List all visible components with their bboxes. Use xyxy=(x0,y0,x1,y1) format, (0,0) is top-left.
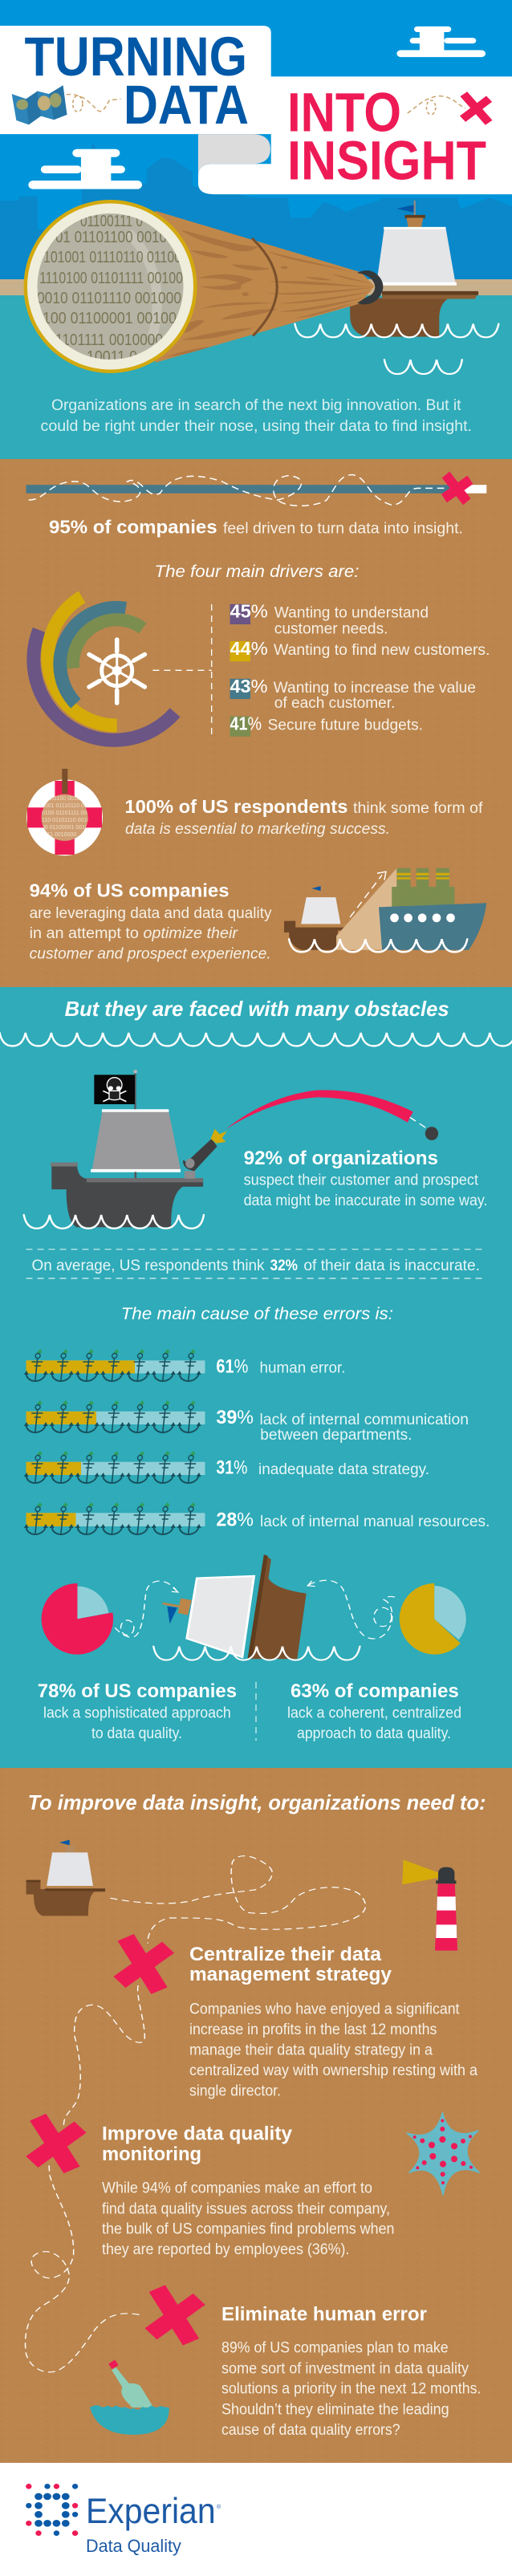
telescope lens xyxy=(24,200,197,373)
icon: x mark one xyxy=(120,1937,169,1991)
panel: obstacles xyxy=(0,987,512,1768)
legend: 41 percent xyxy=(230,713,423,737)
illustration: pirate ship firing cannon xyxy=(24,1070,438,1229)
stat: 100 percent of US respondents: data is essential to marketing success. xyxy=(125,821,390,838)
icon: ship wheel xyxy=(89,639,144,703)
icon: life buoy: 0100 01101111 0010 xyxy=(42,811,93,816)
ship body xyxy=(24,1090,438,1229)
icon: x mark two xyxy=(32,2117,80,2170)
pie chart: 63 percent xyxy=(400,1583,466,1655)
legend: 43 percent xyxy=(230,676,476,712)
legend: 41 percent: Secure future budgets. xyxy=(268,717,423,733)
step: centralize: increase in profits in the last 12 months xyxy=(189,2021,437,2038)
stat: 94 percent of US companies: customer and prospect experience. xyxy=(30,946,271,963)
icon: world map with trail xyxy=(12,85,121,124)
anchor row: 61 percent xyxy=(23,1349,345,1381)
cannon ball arc xyxy=(226,1090,438,1140)
stat: 100 percent of US respondents: 100% of US respondents xyxy=(124,796,347,817)
logo dots xyxy=(26,2484,78,2536)
stat: 94 percent of US companies: in an attempt to optimize their xyxy=(30,925,238,942)
logo wordmark: Data Quality xyxy=(86,2536,181,2556)
title: turning data: DATA xyxy=(124,74,249,136)
title: into insight: INTO xyxy=(287,82,401,143)
callout: 32 percent inaccurate: of their data is inaccurate. xyxy=(303,1258,480,1274)
step: eliminate human error: some sort of investment in data quality xyxy=(221,2360,469,2377)
binary code in lens: 1110100 01101111 00100 xyxy=(39,270,183,287)
waves divider xyxy=(0,1033,512,1046)
cannon xyxy=(183,1129,227,1179)
logo wordmark: ® xyxy=(217,2504,221,2510)
title: turning data: TURNING xyxy=(24,26,247,87)
icon: trail to x mark xyxy=(408,94,490,123)
step: improve monitoring xyxy=(102,2123,395,2258)
stat: 63 percent of companies: lack a coherent, centralized xyxy=(287,1705,461,1722)
legend: 43 percent: 43% xyxy=(230,676,268,697)
title banner shapes xyxy=(0,26,512,194)
intro text: could be right under their nose, using their data to find insight. xyxy=(40,418,472,435)
stat: 92 percent of organizations xyxy=(244,1148,488,1209)
progress bar with trail and x xyxy=(26,475,486,506)
dashed trail: second x to third x xyxy=(26,2165,142,2372)
title: into insight: INSIGHT xyxy=(287,130,486,191)
stat: 94 percent of US companies xyxy=(30,880,272,963)
legend: 45 percent: 45% xyxy=(230,601,268,622)
icon: life buoy: 1111 0010000 xyxy=(42,832,76,838)
legend: 43 percent: of each customer. xyxy=(274,695,395,712)
stat: 63 percent of companies: 63% of companies xyxy=(291,1680,459,1702)
stat: 94 percent of US companies: 94% of US companies xyxy=(30,880,230,901)
stat: 92 percent of organizations: data might be inaccurate in some way. xyxy=(244,1193,488,1209)
icon: life buoy: 01101100 0010 xyxy=(42,796,80,802)
panel: header xyxy=(0,0,512,459)
icon: starfish xyxy=(407,2113,479,2195)
sand strip xyxy=(0,279,512,295)
step: improve monitoring: they are reported by employees (36%). xyxy=(102,2241,349,2258)
step: centralize: Companies who have enjoyed a significant xyxy=(189,2001,460,2017)
illustration: small ship xyxy=(26,1840,105,1916)
legend: 44 percent xyxy=(230,638,490,661)
step: eliminate human error xyxy=(221,2304,482,2439)
stat: 100 percent of US respondents: think some form of xyxy=(353,800,483,817)
teal background xyxy=(0,987,512,1768)
legend: 43 percent: Wanting to increase the value xyxy=(274,680,476,697)
step: eliminate human error: Shouldn’t they eliminate the leading xyxy=(221,2401,449,2418)
stat: 95 percent of companies xyxy=(49,516,463,537)
anchor row: 61 percent: 61% xyxy=(216,1356,248,1378)
waves xyxy=(295,324,498,374)
anchor row: 31 percent: inadequate data strategy. xyxy=(258,1461,429,1478)
binary code in lens: 01100111 0 xyxy=(80,213,143,230)
subheading: four main drivers: The four main drivers are: xyxy=(154,563,360,581)
illustration: sinking ship with trails xyxy=(115,1554,398,1660)
step: improve monitoring: the bulk of US companies find problems when xyxy=(102,2220,395,2237)
panel: footer xyxy=(0,2463,512,2576)
anchor row: 31 percent: 31% xyxy=(216,1457,247,1479)
icon: lighthouse xyxy=(402,1859,457,1951)
logo wordmark: Experian xyxy=(86,2492,216,2531)
step: eliminate human error: Eliminate human error xyxy=(221,2304,427,2326)
illustration: telescope xyxy=(24,200,383,373)
illustration: ship behind telescope xyxy=(350,201,478,337)
pirate flag xyxy=(94,1070,137,1110)
anchor row: 28 percent: lack of internal manual resources. xyxy=(260,1514,490,1530)
logo wordmark xyxy=(86,2492,221,2556)
callout: 32 percent inaccurate: On average, US respondents think xyxy=(32,1258,265,1274)
title: turning data xyxy=(24,26,249,136)
step: centralize xyxy=(189,1944,477,2100)
step: eliminate human error: cause of data quality errors? xyxy=(221,2422,400,2439)
step: centralize: single director. xyxy=(189,2083,281,2100)
step: centralize: Centralize their data xyxy=(189,1944,382,1965)
step: centralize: management strategy xyxy=(189,1964,392,1985)
step: improve monitoring: While 94% of companies make an effort to xyxy=(102,2180,372,2197)
stat: 78 percent of US companies: to data quality. xyxy=(91,1725,182,1742)
icon: life buoy xyxy=(26,769,103,855)
anchor row: 39 percent: between departments. xyxy=(260,1427,412,1444)
stat: 63 percent of companies xyxy=(287,1680,461,1742)
anchor row: 28 percent xyxy=(23,1502,490,1534)
stat: 92 percent of organizations: 92% of organizations xyxy=(244,1148,438,1169)
icon: life buoy: 00 01100001 0010 xyxy=(42,825,88,831)
stat: 95 percent of companies: 95% of companies xyxy=(49,516,217,537)
panel: drivers xyxy=(0,459,512,987)
callout: 32 percent inaccurate xyxy=(26,1249,486,1278)
sky background xyxy=(0,0,512,279)
anchor row: 28 percent: 28% xyxy=(216,1509,254,1531)
step: improve monitoring: monitoring xyxy=(102,2143,201,2165)
legend: 41 percent: 41% xyxy=(230,713,262,733)
step: improve monitoring: Improve data quality xyxy=(102,2123,293,2145)
pie chart: 78 percent xyxy=(42,1583,113,1655)
dashed trail: first x to second x xyxy=(63,1985,144,2125)
anchor row: 31 percent xyxy=(23,1451,429,1483)
stat: 94 percent of US companies: are leveraging data and data quality xyxy=(30,905,272,922)
binary code in lens: 101001 01110110 01100 xyxy=(43,249,181,266)
city skyline xyxy=(0,142,512,279)
icon: cloud left xyxy=(28,149,142,189)
intro text: Organizations are in search of the next big innovation. But it xyxy=(51,397,461,414)
stat: 95 percent of companies: feel driven to turn data into insight. xyxy=(223,520,463,537)
panel: recommendations xyxy=(0,1768,512,2463)
radial bar chart xyxy=(34,597,175,740)
binary code in lens: 100 01100001 00100 xyxy=(43,310,177,327)
subheading: main cause: The main cause of these errors is: xyxy=(121,1305,393,1323)
anchor row: 39 percent: lack of internal communication xyxy=(260,1412,469,1428)
step: improve monitoring: find data quality issues across their company, xyxy=(102,2200,390,2217)
icon: x mark three xyxy=(151,2289,199,2342)
legend: 44 percent: 44% xyxy=(230,638,268,659)
binary code in lens: 10011 0 xyxy=(87,348,137,366)
stat: 78 percent of US companies xyxy=(38,1680,237,1742)
stat: 78 percent of US companies: lack a sophisticated approach xyxy=(43,1705,231,1722)
telescope body xyxy=(155,211,383,363)
step: eliminate human error: 89% of US companies plan to make xyxy=(221,2340,449,2357)
brown background xyxy=(0,459,512,987)
white background xyxy=(0,2463,512,2576)
legend: 45 percent: customer needs. xyxy=(274,620,388,637)
binary code in lens: 1101111 0010000 xyxy=(55,331,163,349)
stat: 92 percent of organizations: suspect their customer and prospect xyxy=(244,1172,479,1188)
connector dashes xyxy=(152,604,212,736)
legend: 44 percent: Wanting to find new customers. xyxy=(274,642,490,659)
step: centralize: centralized way with ownership resting with a xyxy=(189,2062,477,2079)
icon: cloud right xyxy=(396,26,486,57)
anchor row: 61 percent: human error. xyxy=(260,1360,345,1377)
stat: 78 percent of US companies: 78% of US companies xyxy=(38,1680,237,1702)
icon: message in a bottle xyxy=(90,2360,169,2435)
binary code in lens: 01 01101100 0010 xyxy=(55,229,167,246)
binary code in lens: 0010 01101110 001000 xyxy=(37,290,181,307)
sea background xyxy=(0,295,512,459)
anchor row: 39 percent: 39% xyxy=(216,1407,254,1428)
dashed trail: ship to first x xyxy=(111,1856,365,1944)
step: centralize: manage their data quality strategy in a xyxy=(189,2042,433,2059)
heading: obstacles: But they are faced with many obstacles xyxy=(65,997,449,1021)
illustration: small ship and large steamer xyxy=(284,868,486,952)
stat: 100 percent of US respondents xyxy=(124,796,483,838)
icon: life buoy: 110 01101110 0010 xyxy=(42,818,90,823)
anchor row: 39 percent xyxy=(23,1400,469,1444)
intro text xyxy=(40,397,472,435)
callout: 32 percent inaccurate: 32% xyxy=(270,1258,298,1274)
binary code in lens xyxy=(37,213,183,366)
brown background xyxy=(0,1768,512,2463)
title: into insight xyxy=(287,82,486,191)
step: eliminate human error: solutions a priority in the next 12 months. xyxy=(221,2381,482,2398)
stat: 63 percent of companies: approach to data quality. xyxy=(297,1725,451,1742)
legend: 45 percent: Wanting to understand xyxy=(274,605,429,622)
icon: life buoy: 1001 01110110 011 xyxy=(42,803,90,809)
heading: improve data insight: To improve data insight, organizations need to: xyxy=(28,1790,486,1814)
legend: 45 percent xyxy=(230,601,429,637)
